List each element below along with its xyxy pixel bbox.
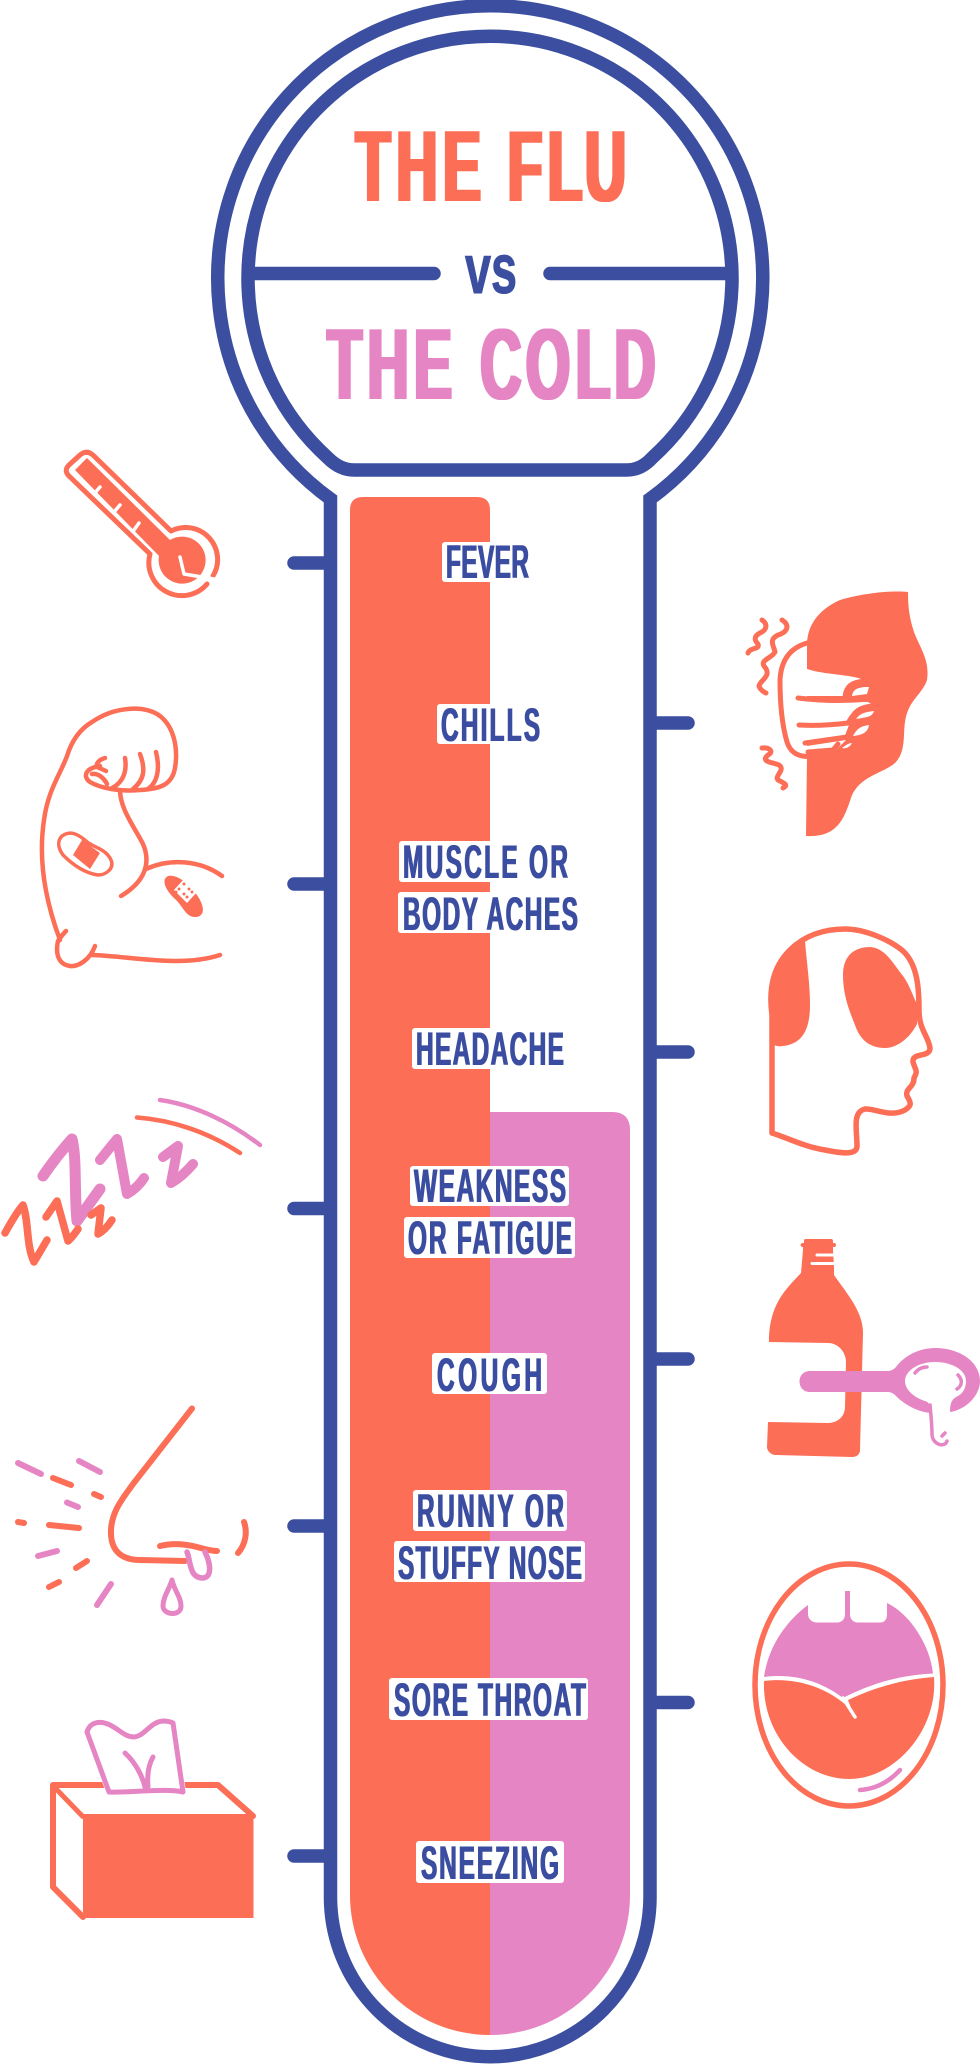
thermometer head inner ring xyxy=(248,36,732,470)
cold bar (pink) xyxy=(490,1112,630,2035)
title: the flu: THE FLU xyxy=(356,111,626,223)
flu bar (red) xyxy=(350,497,490,2035)
label: headache: HEADACHE xyxy=(416,1022,564,1075)
label: sore throat: SORE THROAT xyxy=(394,1673,586,1726)
icon: sore throat open mouth xyxy=(755,1564,943,1806)
label: runny or stuffy nose: STUFFY NOSE xyxy=(398,1536,582,1589)
label: muscle or body aches: MUSCLE OR xyxy=(403,835,568,888)
icon: head with headache xyxy=(771,929,930,1153)
icon: tissue box xyxy=(53,1720,254,1918)
icon: z z z fatigue xyxy=(5,1100,260,1262)
label: weakness or fatigue xyxy=(404,1159,575,1264)
label: muscle or body aches xyxy=(398,835,579,940)
label: runny or stuffy nose: RUNNY OR xyxy=(417,1484,564,1537)
label: runny or stuffy nose xyxy=(394,1484,585,1589)
title: vs: vs xyxy=(465,230,517,308)
head divider xyxy=(250,267,730,280)
icon: aching head with hand xyxy=(748,591,928,836)
label: fever: FEVER xyxy=(446,535,529,588)
label: chills: CHILLS xyxy=(441,698,540,751)
label: cough: COUGH xyxy=(437,1348,542,1401)
icon: thermometer xyxy=(66,452,218,596)
icon: sneezing nose xyxy=(18,1408,246,1614)
label: weakness or fatigue: OR FATIGUE xyxy=(408,1211,572,1264)
label: sneezing: SNEEZING xyxy=(421,1836,559,1889)
label: muscle or body aches: BODY ACHES xyxy=(403,887,578,940)
tick marks xyxy=(294,563,688,1856)
icon: cough syrup bottle and spoon xyxy=(767,1239,980,1457)
title: the cold: THE COLD xyxy=(327,309,655,421)
label: weakness or fatigue: WEAKNESS xyxy=(414,1159,566,1212)
icon: flexed arm xyxy=(42,709,222,966)
thermometer outer outline xyxy=(218,6,763,2057)
